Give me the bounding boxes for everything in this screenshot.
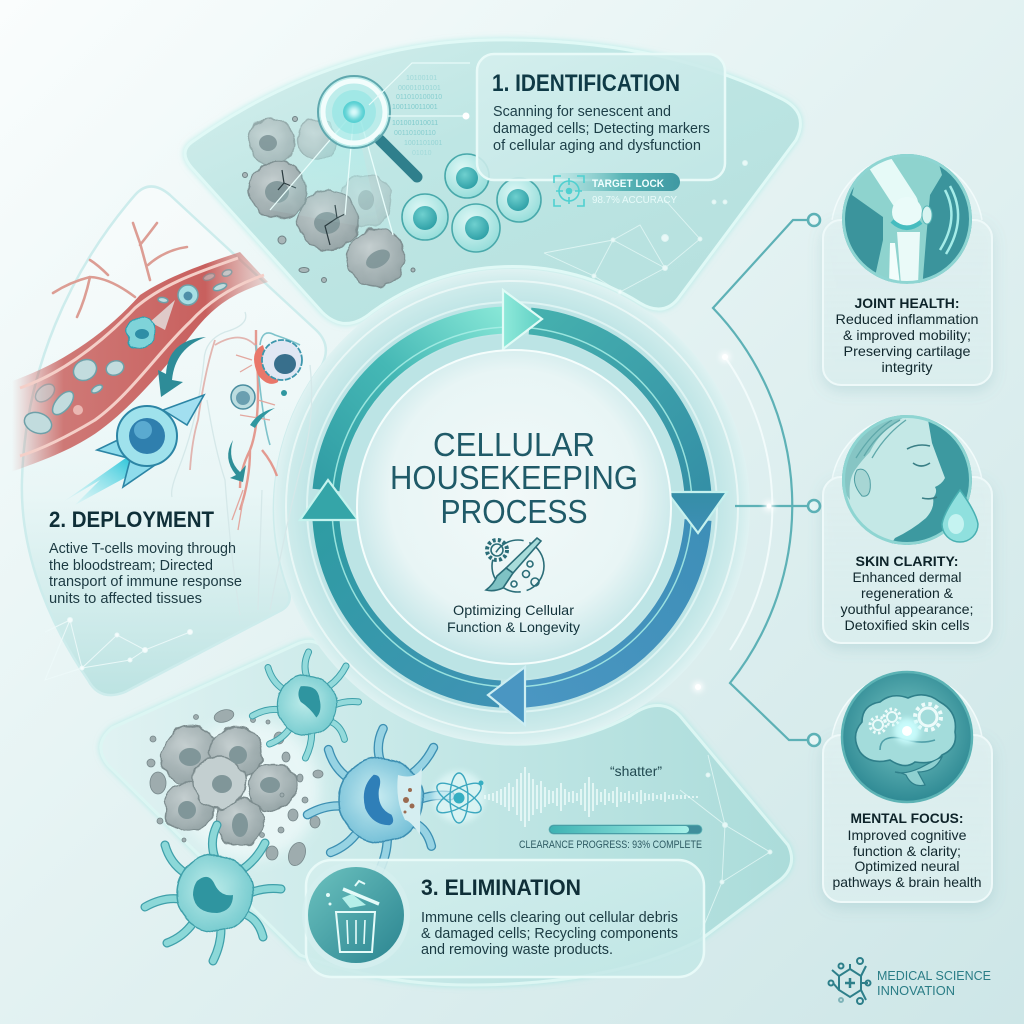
heading: deployment: 2. DEPLOYMENT [49, 507, 215, 532]
text: logo: INNOVATION [877, 983, 955, 998]
text: identification body: Scanning for senescent and [493, 104, 671, 120]
icon: brain with gears [842, 672, 972, 802]
subtitle: Function & Longevity [447, 619, 580, 635]
scan line and binary data: 00001010101 [398, 85, 441, 92]
text: identification body: of cellular aging and dysfunction [493, 138, 701, 154]
arrow head: top [503, 290, 542, 349]
text: mental focus body: pathways & brain health [832, 874, 982, 890]
card: elimination [302, 860, 704, 977]
icon: magnifying glass with scan beams [270, 76, 417, 235]
illustration: blood vessel [0, 223, 268, 476]
text: skin clarity body: regeneration & [861, 585, 954, 601]
panel: elimination background [101, 641, 792, 985]
icon: trash can badge [302, 861, 410, 969]
card: skin clarity [823, 408, 992, 643]
text: identification body: damaged cells; Detecting markers [493, 121, 710, 137]
subtitle [447, 602, 580, 635]
label: clearance progress: CLEARANCE PROGRESS: 93% COMPLETE [519, 839, 702, 851]
network pattern: elimination panel [680, 755, 772, 935]
text: deployment body: transport of immune response [49, 574, 242, 590]
text: joint health body: Preserving cartilage [844, 343, 971, 359]
network pattern: deployment panel [45, 618, 192, 680]
scan line and binary data: 011010100010 [396, 94, 442, 101]
illustration: healthy teal cells [402, 154, 541, 252]
text: skin clarity body [840, 569, 974, 633]
waveform [485, 767, 697, 827]
text: logo [877, 968, 991, 998]
heading: mental focus: MENTAL FOCUS: [850, 810, 964, 826]
text: joint health body: integrity [882, 359, 932, 375]
text: elimination body: Immune cells clearing out cellular debris [421, 910, 678, 926]
icon: molecule [828, 958, 870, 1004]
arrow head: bottom [488, 667, 525, 725]
text: elimination body: and removing waste products. [421, 942, 613, 958]
vessel body [0, 252, 268, 476]
text: elimination body [421, 910, 678, 958]
blood and immune cells [21, 268, 233, 437]
text: joint health body: Reduced inflammation [836, 311, 978, 327]
text: mental focus body: Improved cognitive [848, 827, 967, 843]
human body with circulatory system [172, 312, 312, 615]
title: PROCESS [440, 493, 588, 530]
progress bar [549, 825, 702, 834]
scan line and binary data: 1001101001 [404, 140, 443, 147]
immune cell upper [262, 340, 302, 380]
arrow: deployment curve [158, 337, 206, 397]
illustration: macrophage bottom [145, 825, 281, 961]
capillary branches [53, 223, 187, 317]
text: skin clarity body: youthful appearance; [840, 601, 974, 617]
glow dots [693, 352, 774, 692]
text: deployment body: the bloodstream; Directed [49, 558, 213, 574]
badge: target lock: 98.7% ACCURACY [592, 194, 677, 206]
icon: face with droplet [842, 415, 979, 545]
text: joint health body [836, 311, 978, 375]
central halo disc [274, 269, 772, 745]
heading: joint health: JOINT HEALTH: [854, 295, 960, 311]
scan line and binary data: 00110100110 [394, 130, 436, 137]
scan line and binary data: 100110011001 [392, 104, 438, 111]
icon: knee [842, 150, 972, 290]
illustration: damaged grey cells [242, 116, 415, 286]
text: deployment body: units to affected tissues [49, 591, 202, 607]
text: logo: MEDICAL SCIENCE [877, 968, 991, 983]
heading: identification: 1. IDENTIFICATION [492, 70, 680, 97]
text: identification body [493, 104, 710, 154]
card: mental focus [823, 672, 992, 902]
panel: deployment background [22, 186, 326, 695]
subtitle: Optimizing Cellular [453, 602, 574, 618]
center disc [357, 350, 671, 664]
text: deployment body [49, 541, 242, 607]
scan line and binary data [369, 63, 470, 157]
logo: medical science innovation [828, 958, 991, 1004]
illustration: macrophage engulfing debris [308, 729, 450, 871]
arrow head: left [300, 480, 358, 520]
cycle ring with four arrows [300, 290, 727, 725]
title [390, 426, 638, 530]
heart [254, 345, 278, 384]
text: mental focus body: Optimized neural [854, 858, 960, 874]
badge: target lock: TARGET LOCK [592, 178, 664, 190]
icon: atom [433, 771, 485, 823]
illustration: grey debris cluster [147, 708, 323, 868]
text: skin clarity body: Enhanced dermal [852, 569, 962, 585]
scan line and binary data: 101001010011 [392, 120, 438, 127]
network pattern: identification panel [544, 160, 748, 294]
text: mental focus body [832, 827, 982, 890]
text: skin clarity body: Detoxified skin cells [844, 617, 970, 633]
arrow head: right [667, 492, 727, 533]
text: elimination body: & damaged cells; Recycling components [421, 926, 678, 942]
panel: identification background [185, 40, 800, 323]
icon: rocket cell [63, 395, 204, 505]
card: joint health [823, 150, 992, 385]
card: identification text [477, 54, 725, 180]
illustration: macrophage top [252, 652, 358, 758]
scan line and binary data: 10100101 [406, 75, 437, 82]
text: joint health body: & improved mobility; [843, 327, 971, 343]
title: HOUSEKEEPING [390, 459, 638, 496]
heading: skin clarity: SKIN CLARITY: [856, 553, 958, 569]
icon: gear, palette and brush [486, 538, 544, 592]
immune cell lower [231, 385, 255, 409]
heading: elimination: 3. ELIMINATION [421, 875, 581, 900]
scan line and binary data: 01010 [412, 150, 432, 157]
badge: target lock [553, 173, 680, 206]
label: shatter: “shatter” [610, 763, 662, 779]
text: deployment body: Active T-cells moving through [49, 541, 236, 557]
title: CELLULAR [433, 426, 595, 463]
icon: target [554, 176, 584, 206]
active T-cell in vessel [125, 300, 175, 348]
connector lines to benefits [713, 214, 820, 746]
text: mental focus body: function & clarity; [853, 843, 961, 859]
small curved arrows [250, 408, 275, 428]
